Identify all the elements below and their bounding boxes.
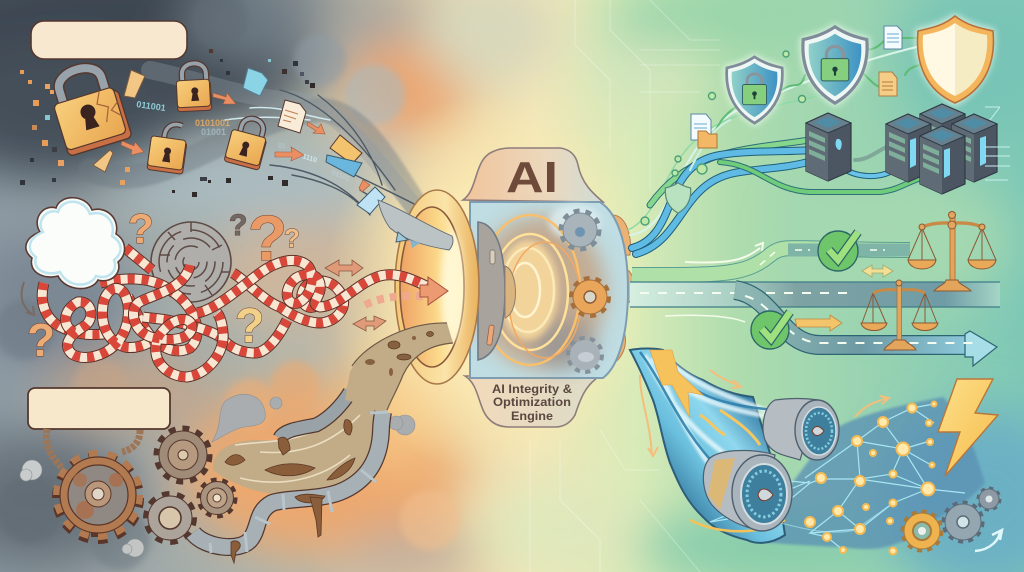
bottom-right panel: accelerated performance	[630, 348, 1002, 554]
orange gear	[573, 280, 607, 314]
checkmark top	[818, 231, 858, 271]
question marks: ?	[128, 205, 154, 252]
maze	[151, 222, 231, 302]
banner: blank security label	[31, 21, 187, 59]
smoke puffs	[20, 394, 415, 557]
main straight road	[630, 282, 1000, 307]
question marks: ?	[284, 223, 300, 253]
server racks	[806, 104, 1010, 194]
scales small	[861, 280, 938, 350]
gear: grey lower	[147, 495, 193, 541]
rusty connector arcs	[46, 429, 140, 468]
bottom-left panel: rusty machinery	[20, 360, 415, 563]
bottom tab with engine name: Optimization	[493, 397, 571, 409]
rope arrowhead	[420, 277, 448, 305]
binary text: 01101	[330, 169, 351, 183]
icon: padlock right	[224, 114, 271, 170]
swirl accent	[975, 530, 1002, 551]
middle-right panel: compliant pathways	[630, 212, 1000, 366]
network backdrop	[750, 397, 985, 549]
question marks	[27, 202, 300, 366]
small shield	[665, 183, 691, 213]
bottom tab with engine name: AI Integrity &	[492, 384, 572, 396]
pale direction arrows	[685, 243, 763, 262]
puffy cloud edges	[0, 0, 460, 570]
mud stream into engine	[213, 360, 403, 495]
gear: large rusty	[59, 456, 137, 537]
gear: small right	[200, 481, 234, 515]
curved arrow near cloud	[22, 282, 34, 315]
shield lock right	[803, 27, 867, 103]
icon: large cracked padlock	[45, 60, 132, 156]
leaking pipes	[193, 392, 388, 553]
connector nodes	[641, 51, 806, 225]
icon: padlock top	[175, 63, 212, 112]
grey gear bottom	[569, 339, 601, 371]
debris swirl into engine	[90, 70, 445, 240]
central engine	[197, 148, 634, 427]
middle-left panel: tangled logic	[22, 198, 386, 377]
binary text: 011001	[136, 99, 166, 113]
orange speed arrows	[640, 370, 889, 456]
shield lock left	[727, 57, 782, 123]
debris stream entering	[378, 200, 453, 250]
question marks: ?	[27, 314, 55, 366]
data conduits	[628, 38, 925, 254]
cloud bubble	[26, 198, 125, 289]
top tab with AI label	[463, 148, 603, 202]
gear: medium top	[158, 430, 208, 480]
binary text	[136, 99, 351, 183]
mud hose entering	[345, 323, 453, 410]
upper green road	[632, 248, 910, 275]
icon: broken padlock lower	[147, 121, 189, 174]
flying documents and folder	[93, 68, 385, 214]
question marks: ?	[248, 202, 287, 274]
blue speed stream	[630, 348, 790, 543]
large lightning bolt	[938, 379, 998, 476]
energy vortex	[480, 215, 581, 365]
top tab with AI label: AI	[506, 153, 558, 202]
jet turbine front	[703, 450, 792, 531]
large gold shield	[917, 16, 993, 103]
checkmark bottom	[751, 311, 790, 349]
neural network	[710, 402, 965, 554]
question marks: ?	[229, 209, 247, 242]
rope tail into funnel	[197, 260, 436, 313]
gear: grey large	[945, 504, 981, 540]
gear: grey small	[979, 489, 999, 509]
left panel: security threats	[20, 21, 445, 240]
front funnel ring	[395, 190, 479, 384]
bottom tab with engine name	[465, 376, 600, 427]
lower exit road with arrowhead	[735, 290, 997, 366]
glass body	[470, 202, 628, 378]
top-right panel: secure data	[628, 14, 1010, 254]
central glow	[325, 95, 655, 475]
scales large	[908, 212, 996, 291]
jet turbine rear	[763, 398, 839, 460]
banner: blank rusted label	[28, 388, 170, 429]
balance arrows	[862, 265, 893, 277]
light rays and circuit traces	[530, 0, 720, 572]
bottom tab with engine name: Engine	[511, 411, 553, 423]
arrows between locks	[121, 93, 370, 192]
binary text: 01	[278, 143, 286, 150]
binary text: 0101001	[195, 118, 230, 128]
documents	[691, 26, 902, 148]
double-headed arrows	[325, 260, 386, 331]
bolt in stream	[650, 350, 703, 418]
mud clumps and drips	[225, 377, 373, 563]
question marks: ?	[235, 300, 264, 353]
gear: orange	[904, 513, 940, 549]
rear connector nubs	[612, 215, 634, 364]
binary text: 1110	[301, 153, 318, 165]
pixel debris	[20, 49, 315, 197]
barrel collar	[478, 222, 505, 360]
shield glows	[724, 14, 995, 126]
grey gear top	[562, 212, 598, 248]
binary text: 01001	[201, 127, 226, 137]
tangled candy-striped rope	[42, 248, 344, 377]
